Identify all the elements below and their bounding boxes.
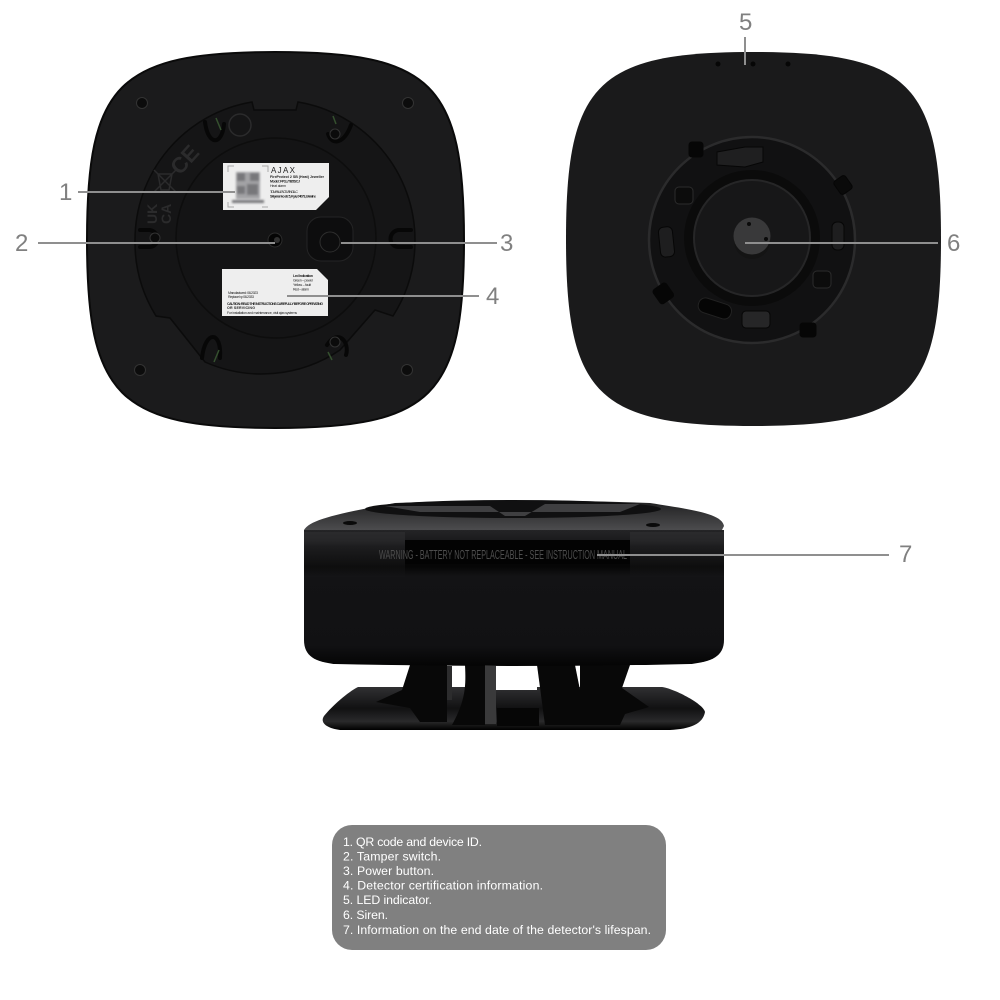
siren housing ring [649,137,855,343]
end of life warning text: WARNING - BATTERY NOT REPLACEABLE - SEE INSTRUCTION MANUAL [379,547,627,562]
callout line 3 [341,242,497,244]
number 3: 3 [500,230,513,257]
certification marks [144,114,251,224]
QR and device ID sticker: Sklyarenko str. 5, Kyiv, 04073, Ukraine [270,194,316,198]
certification sticker: Red – alarm [293,288,309,292]
wall reflections [304,532,724,578]
certification marks: CA [158,204,174,224]
device body [87,52,464,428]
certification sticker: Replace by 08.2033 [228,295,254,299]
QR code [232,172,264,203]
legend list: 6. Siren. [343,908,388,922]
device body [566,52,941,426]
QR and device ID sticker: FireProtect 2 SB (Heat) Jeweller [270,175,325,179]
number 6: 6 [947,230,960,257]
legend list: 1. QR code and device ID. [343,835,482,849]
callout line 7 [597,554,889,556]
number 2: 2 [15,230,28,257]
legend list [343,835,651,937]
mounting slots [140,116,411,362]
power button [307,217,353,261]
certification sticker: Yellow – fault [293,283,311,287]
number 1: 1 [59,179,72,206]
QR and device ID sticker [223,163,329,210]
legend list: 5. LED indicator. [343,893,432,907]
certification sticker: Led Indication [293,274,313,278]
callout line 5 [744,37,746,65]
LED indicator holes [716,62,790,66]
mounting legs [376,665,649,726]
legend list: 4. Detector certification information. [343,878,543,892]
mounting base [323,687,705,730]
legend panel [332,825,666,950]
tamper switch hole [268,233,282,247]
certification marks: CE [165,140,204,179]
QR and device ID sticker: Heat alarm [270,184,286,188]
legend list: 7. Information on the end date of the detector's lifespan. [343,923,651,937]
certification sticker: Green – power [293,278,314,282]
number 7: 7 [899,541,912,568]
device: side view [304,500,724,730]
QR and device ID sticker: Model: FP1L/TB5SCJ [270,180,300,184]
internal clips and ports [652,142,853,337]
device: rear view with labels [87,52,464,428]
inner siren disc [694,180,810,296]
callout line 2 [38,242,275,244]
certification sticker [222,269,328,316]
certification sticker: CAUTION: READ THE INSTRUCTIONS CAREFULLY BEFORE OPERATING [227,302,323,306]
top surface [304,500,724,530]
corner screws [134,98,414,376]
top plate [343,500,661,527]
callout line 6 [745,242,938,244]
inner disc [176,138,376,338]
number labels [15,9,960,568]
legend list: 2. Tamper switch. [343,850,441,864]
siren centre knob [734,218,770,259]
QR and device ID sticker: TD MANUFACTURING LLC [270,190,298,194]
device: front view [566,52,941,426]
certification marks: UK [144,204,160,224]
callout line 1 [78,191,235,193]
mounting ring [135,102,415,374]
number 5: 5 [739,9,752,36]
end of life warning text [379,540,630,564]
certification sticker: OR SERVICING [227,306,255,310]
callout line 4 [287,295,479,297]
number 4: 4 [486,283,499,310]
body wall [304,530,724,666]
QR and device ID sticker: AJAX [271,166,296,175]
callout lines [38,37,938,555]
legend list: 3. Power button. [343,864,434,878]
certification sticker: Manufactured: 08.2023 [228,291,258,295]
certification sticker: For installation and maintenance, visit ajax.systems [227,311,297,315]
